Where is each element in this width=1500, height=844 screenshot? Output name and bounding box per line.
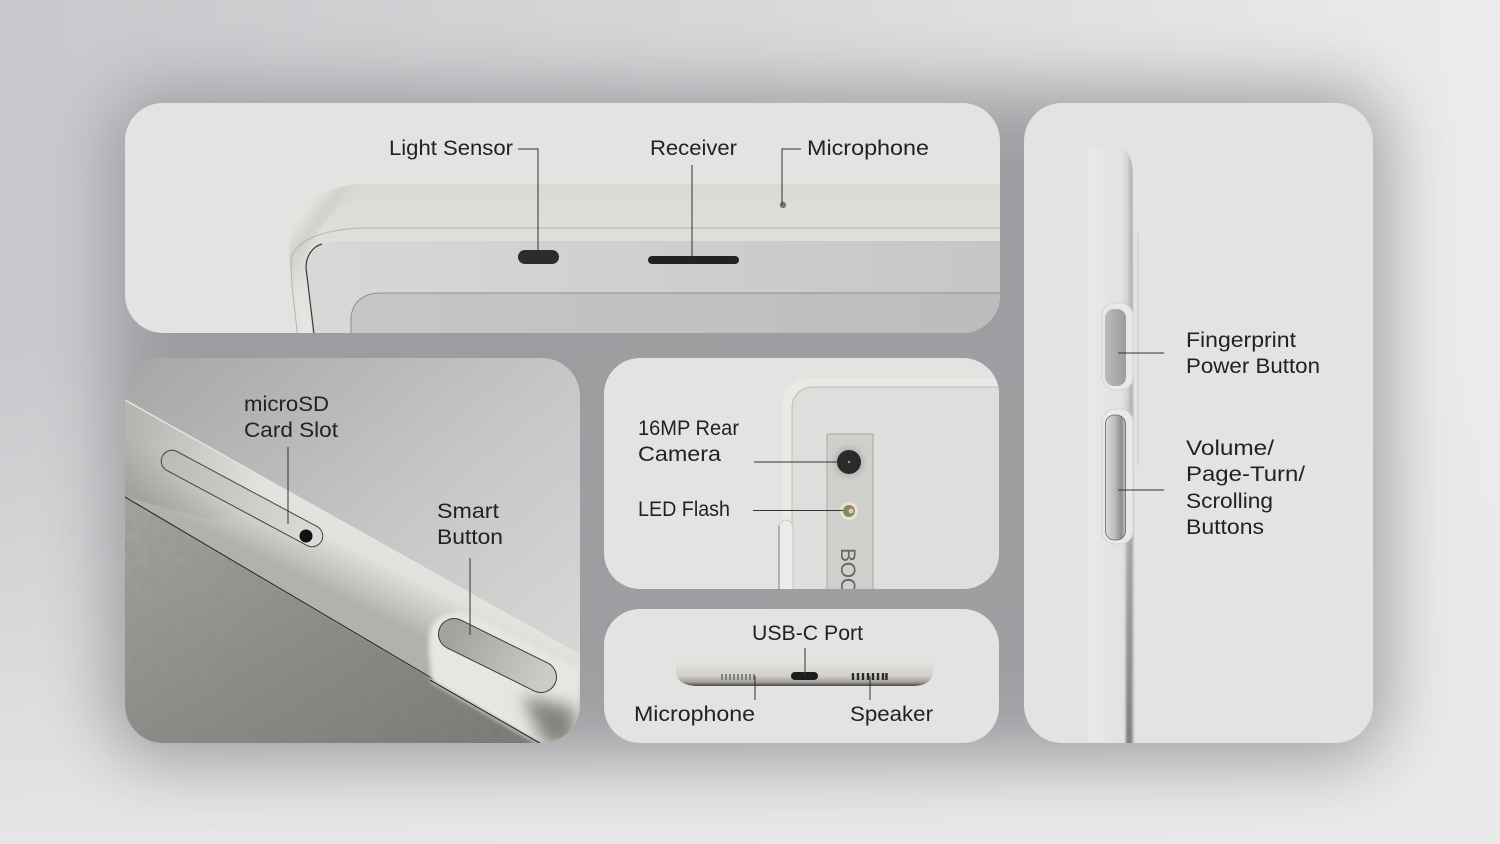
label: Smart Button <box>437 500 503 635</box>
label: Volume / Page-Turn / Scrolling Buttons <box>1118 437 1305 539</box>
icon: bottom microphone holes <box>722 674 754 680</box>
label: 16MP Rear Camera <box>638 417 838 466</box>
icon: speaker holes <box>853 673 886 680</box>
device side illustration <box>125 400 580 760</box>
icon: USB-C port <box>791 672 818 680</box>
label: LED Flash: LED Flash <box>638 498 730 521</box>
label: Fingerprint Power Button: Power Button <box>1186 355 1320 378</box>
device rear illustration <box>779 378 1000 608</box>
label: Microphone <box>782 137 929 205</box>
label: Speaker: Speaker <box>850 703 933 726</box>
icon: volume buttons <box>1102 409 1133 544</box>
label: USB-C Port <box>752 622 863 676</box>
label: microSD Card Slot: microSD <box>244 393 329 416</box>
label: Microphone: Microphone <box>807 137 929 160</box>
label: 16MP Rear Camera: 16MP Rear <box>638 417 739 440</box>
icon: top microphone hole <box>780 202 786 208</box>
panel: top edge <box>125 103 1000 340</box>
icon: receiver slot <box>648 256 739 264</box>
label: Light Sensor <box>389 137 538 250</box>
label: Volume / Page-Turn / Scrolling Buttons: Volume/ <box>1186 437 1274 460</box>
label: Receiver: Receiver <box>650 137 737 160</box>
label: Smart Button: Button <box>437 526 503 549</box>
icon: smart button <box>454 634 541 677</box>
label: USB-C Port: USB-C Port <box>752 622 863 645</box>
icon: LED flash <box>840 502 858 520</box>
label: Volume / Page-Turn / Scrolling Buttons: Scrolling <box>1186 490 1273 513</box>
panel: left edge slot and button <box>125 358 580 760</box>
device side illustration <box>1124 150 1139 743</box>
icon: fingerprint power button <box>1102 303 1133 390</box>
label: Microphone: Microphone <box>634 703 755 726</box>
panel: rear camera <box>604 358 1000 608</box>
label: Microphone <box>634 676 755 726</box>
icon: rear camera lens <box>834 447 864 477</box>
label: Fingerprint Power Button: Fingerprint <box>1186 329 1296 352</box>
label: Fingerprint Power Button <box>1118 329 1320 378</box>
label: Volume / Page-Turn / Scrolling Buttons: Page-Turn/ <box>1186 463 1305 486</box>
device top bezel illustration <box>289 184 1000 340</box>
panel: bottom edge ports <box>604 609 999 743</box>
rear branding text: BOOX <box>836 548 859 608</box>
device bottom edge illustration <box>676 660 933 686</box>
label: microSD Card Slot: Card Slot <box>244 419 338 442</box>
label: Volume / Page-Turn / Scrolling Buttons: Buttons <box>1186 516 1264 539</box>
label: Smart Button: Smart <box>437 500 499 523</box>
label: Receiver <box>650 137 737 258</box>
label: Speaker <box>850 676 933 726</box>
label: 16MP Rear Camera: Camera <box>638 443 721 466</box>
label: microSD Card Slot <box>244 393 338 524</box>
icon: microSD card slot <box>172 461 312 542</box>
panel: side buttons <box>1024 103 1373 750</box>
label: Light Sensor: Light Sensor <box>389 137 513 160</box>
icon: light sensor <box>518 250 559 264</box>
